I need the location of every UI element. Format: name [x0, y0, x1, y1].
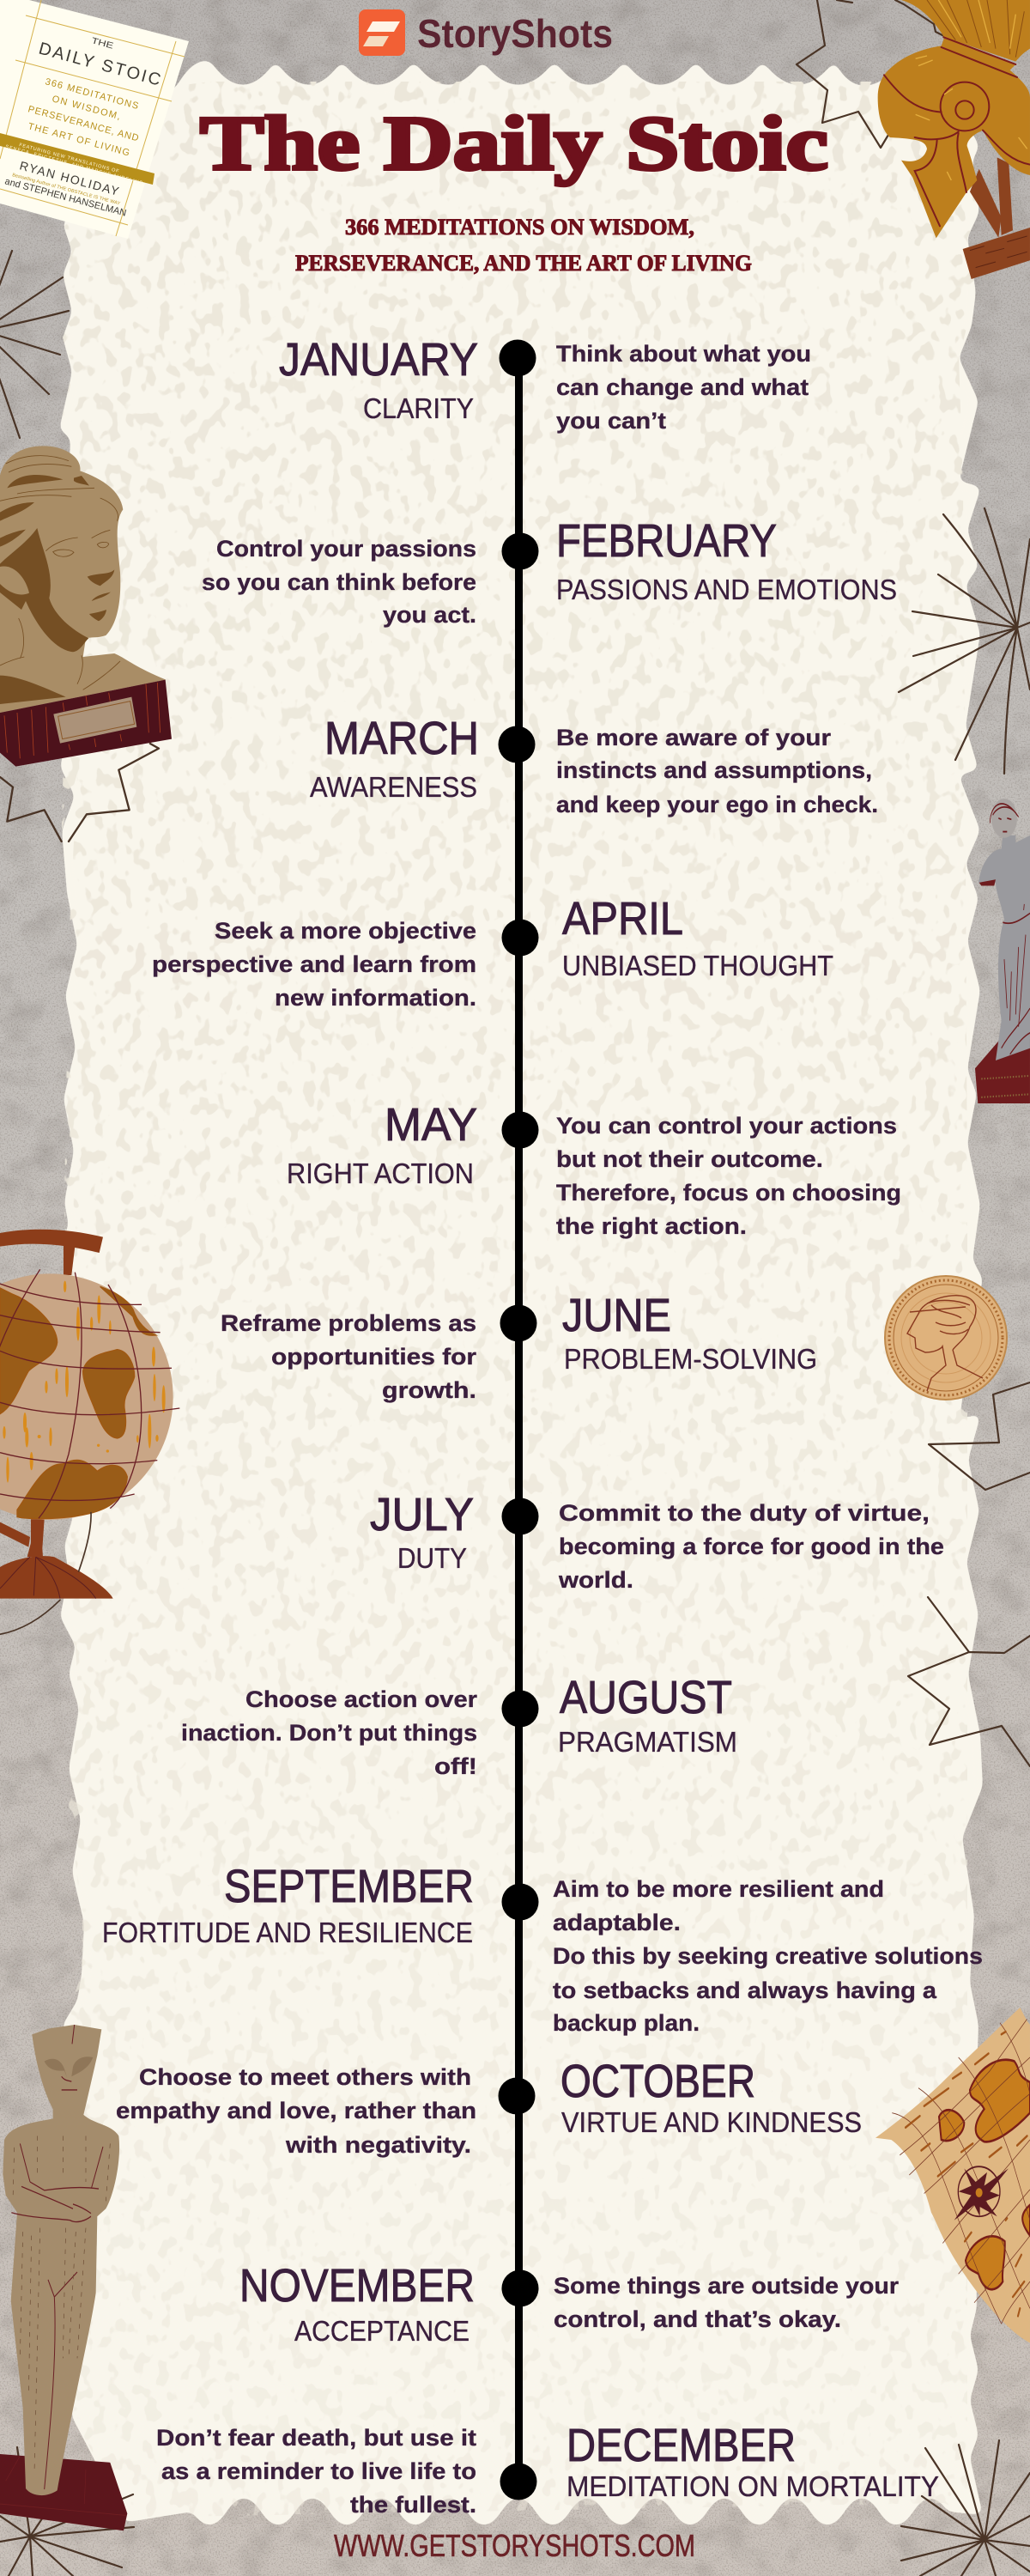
May: You can control your actions [556, 1113, 897, 1139]
May: RIGHT ACTION [287, 1157, 474, 1189]
book title text: PERSEVERANCE, AND [27, 104, 140, 143]
September: to setbacks and always having a [553, 1978, 937, 2003]
subtitle: 366 MEDITATIONS ON WISDOM, [345, 215, 694, 240]
subtitle: PERSEVERANCE, AND THE ART OF LIVING [295, 251, 752, 276]
June: PROBLEM-SOLVING [564, 1343, 817, 1375]
icon: roman helmet [878, 0, 1030, 279]
December [156, 2420, 939, 2518]
January: can change and what [556, 374, 809, 400]
January [279, 334, 811, 434]
May: Therefore, focus on choosing [556, 1180, 901, 1206]
December: as a reminder to live life to [161, 2458, 476, 2484]
February: Control your passions [216, 536, 476, 562]
book title text: DAILY STOIC [37, 39, 162, 90]
September: adaptable. [553, 1910, 681, 1935]
logo wordmark: StoryShots [417, 11, 613, 56]
May: MAY [385, 1099, 477, 1151]
January: Think about what you [556, 341, 811, 367]
book title text: SENECA, EPICTETUS, AND MARCUS AURELIUS [4, 144, 143, 186]
website url: WWW.GETSTORYSHOTS.COM [334, 2528, 695, 2563]
May: but not their outcome. [556, 1146, 823, 1172]
November: NOVEMBER [239, 2260, 475, 2312]
April: APRIL [562, 893, 683, 945]
October: with negativity. [285, 2132, 471, 2158]
decorative star outline behind helmet [797, 0, 944, 148]
September [102, 1861, 983, 2036]
December: the fullest. [350, 2492, 476, 2518]
February: so you can think before [202, 569, 476, 595]
February [202, 515, 897, 628]
March: MARCH [324, 713, 479, 764]
March: instincts and assumptions, [556, 757, 872, 783]
May: the right action. [556, 1213, 747, 1239]
April [152, 893, 833, 1011]
timeline spine [515, 358, 523, 2482]
November: ACCEPTANCE [294, 2315, 470, 2347]
September: Do this by seeking creative solutions [553, 1943, 983, 1969]
icon: globe [0, 1230, 179, 1634]
decorative star lines: right upper [899, 508, 1030, 774]
March: Be more aware of your [556, 725, 832, 750]
July: world. [558, 1567, 633, 1593]
April: UNBIASED THOUGHT [562, 950, 833, 981]
book title text: ON WISDOM, [51, 94, 122, 122]
decorative star lines: bottom right [901, 2440, 1030, 2576]
August: off! [434, 1753, 477, 1779]
title: The Daily Stoic [200, 101, 828, 186]
August [181, 1672, 737, 1779]
book title text: Bestselling Author of THE OBSTACLE IS THE WAY [11, 173, 121, 207]
June: growth. [382, 1377, 476, 1403]
October [116, 2056, 862, 2158]
icon: carved idol statue on slab [0, 2025, 127, 2530]
icon: treasure map [876, 2008, 1030, 2343]
June [221, 1290, 817, 1403]
July: JULY [370, 1489, 474, 1540]
February: PASSIONS AND EMOTIONS [556, 574, 897, 605]
book cover [0, 0, 189, 239]
February: you act. [383, 602, 476, 628]
icon: coin [885, 1276, 1007, 1400]
July: DUTY [397, 1542, 467, 1574]
January: you can’t [556, 408, 666, 434]
November: control, and that’s okay. [554, 2306, 841, 2332]
logo icon [359, 9, 405, 56]
March [310, 713, 878, 817]
January: JANUARY [279, 334, 478, 386]
decorative star outlines on the right side [908, 1382, 1030, 1766]
October: Choose to meet others with [139, 2064, 471, 2090]
April: perspective and learn from [152, 951, 476, 977]
August: PRAGMATISM [558, 1726, 737, 1758]
December: Don’t fear death, but use it [156, 2425, 476, 2451]
book title text [3, 36, 162, 219]
April: Seek a more objective [215, 918, 476, 944]
October: VIRTUE AND KINDNESS [561, 2106, 862, 2138]
December: MEDITATION ON MORTALITY [566, 2470, 939, 2502]
November: Some things are outside your [554, 2273, 900, 2299]
book title text: 366 MEDITATIONS [44, 76, 140, 112]
November [239, 2260, 900, 2347]
book title text: RYAN HOLIDAY [18, 158, 121, 198]
March: and keep your ego in check. [556, 792, 878, 817]
March: AWARENESS [310, 771, 477, 803]
December: DECEMBER [566, 2420, 796, 2471]
June: Reframe problems as [221, 1310, 476, 1336]
October: OCTOBER [560, 2056, 755, 2107]
timeline dots [498, 340, 539, 2500]
October: empathy and love, rather than [116, 2098, 476, 2123]
July: becoming a force for good in the [559, 1534, 944, 1559]
September: SEPTEMBER [224, 1861, 474, 1912]
book title text: and STEPHEN HANSELMAN [3, 176, 127, 219]
icon: classical bust [0, 446, 172, 841]
July: Commit to the duty of virtue, [559, 1500, 930, 1526]
decorative star lines: bottom left [0, 2447, 134, 2576]
September: backup plan. [553, 2010, 700, 2036]
August: Choose action over [245, 1686, 478, 1712]
September: Aim to be more resilient and [553, 1876, 884, 1902]
book title text: THE ART OF LIVING [27, 121, 130, 158]
subtitle [295, 215, 752, 276]
book title text: FEATURING NEW TRANSLATIONS OF [18, 143, 120, 174]
June: opportunities for [271, 1344, 477, 1370]
February: FEBRUARY [556, 515, 777, 567]
August: AUGUST [560, 1672, 732, 1723]
logo: StoryShots [359, 9, 613, 56]
May [287, 1099, 901, 1239]
June: JUNE [562, 1290, 671, 1341]
January: CLARITY [363, 392, 474, 424]
August: inaction. Don’t put things [181, 1720, 477, 1746]
icon: statue on pedestal (right) [975, 799, 1030, 1103]
July [370, 1489, 944, 1593]
decorative star lines: left top [0, 251, 69, 438]
book title text: THE [90, 36, 115, 52]
September: FORTITUDE AND RESILIENCE [102, 1917, 473, 1948]
April: new information. [275, 985, 476, 1011]
